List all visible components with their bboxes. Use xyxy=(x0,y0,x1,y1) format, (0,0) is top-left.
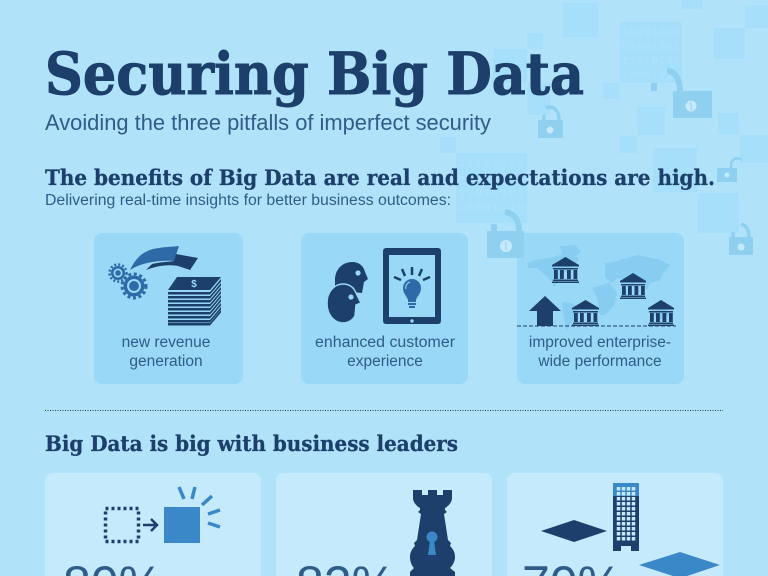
title: Securing Big Data xyxy=(45,40,584,108)
icon: bank northeast xyxy=(620,273,646,299)
label: wide performance xyxy=(537,353,662,370)
icon: gears xyxy=(110,264,146,298)
heading: benefits: The benefits of Big Data are real and expectations are high. xyxy=(45,165,715,190)
icon: bank south xyxy=(572,300,599,326)
background: data squares and padlocks: 01001001 xyxy=(622,42,680,54)
icon: padlock over panel xyxy=(487,212,524,258)
icon: two heads xyxy=(327,262,368,323)
icon: padlock large xyxy=(667,71,712,118)
label: new revenue xyxy=(122,334,210,351)
background: data squares and padlocks: 10101010 xyxy=(458,158,524,170)
icon: padlock lower right xyxy=(729,224,753,255)
label: generation xyxy=(129,353,203,370)
panel: enhanced customer experience xyxy=(301,233,468,384)
icon: dark diamond xyxy=(541,520,607,542)
background: data squares and padlocks: 10001010 xyxy=(458,203,524,215)
label: enhanced customer xyxy=(315,334,455,351)
icon: money stack: $ xyxy=(191,279,197,290)
background: data squares and padlocks: 10101010 xyxy=(622,28,680,40)
panel: 70% xyxy=(507,473,723,576)
icon: office tower xyxy=(613,483,639,551)
background: data squares and padlocks xyxy=(440,0,768,255)
subtitle: Avoiding the three pitfalls of imperfect security xyxy=(45,110,491,135)
label xyxy=(315,334,455,370)
icon: swoosh arrows xyxy=(130,246,198,270)
icon: tablet with light bulb xyxy=(383,248,441,324)
icon: world map xyxy=(527,245,670,330)
background: data squares and padlocks: 11010101 xyxy=(458,188,524,200)
label: experience xyxy=(347,353,423,370)
icon: up arrow xyxy=(529,296,561,326)
icon: padlock small right xyxy=(717,158,742,182)
icon: bank northwest xyxy=(552,257,579,283)
panel: 82% xyxy=(276,473,492,576)
icon: padlock small title xyxy=(538,107,563,138)
heading: business leaders: Big Data is big with business leaders xyxy=(45,431,458,456)
background: data squares and padlocks: 01001001 xyxy=(458,173,524,185)
panel: new revenue generation xyxy=(94,233,243,384)
icon: rook with keyhole xyxy=(410,490,455,576)
background: data squares and padlocks: 11010101 xyxy=(622,56,680,68)
label: improved enterprise- xyxy=(529,334,671,351)
icon: money stack xyxy=(168,277,221,326)
subheading: benefits: Delivering real-time insights for better business outcomes: xyxy=(45,192,451,209)
icon: blue diamond xyxy=(639,552,720,576)
background: data squares and padlocks: 10001010 xyxy=(622,70,680,82)
panel: improved enterprise-wide performance xyxy=(517,233,684,384)
icon: bank southeast xyxy=(648,300,674,326)
panel: 80% xyxy=(45,473,261,576)
icon: dotted square to solid square xyxy=(106,487,220,543)
